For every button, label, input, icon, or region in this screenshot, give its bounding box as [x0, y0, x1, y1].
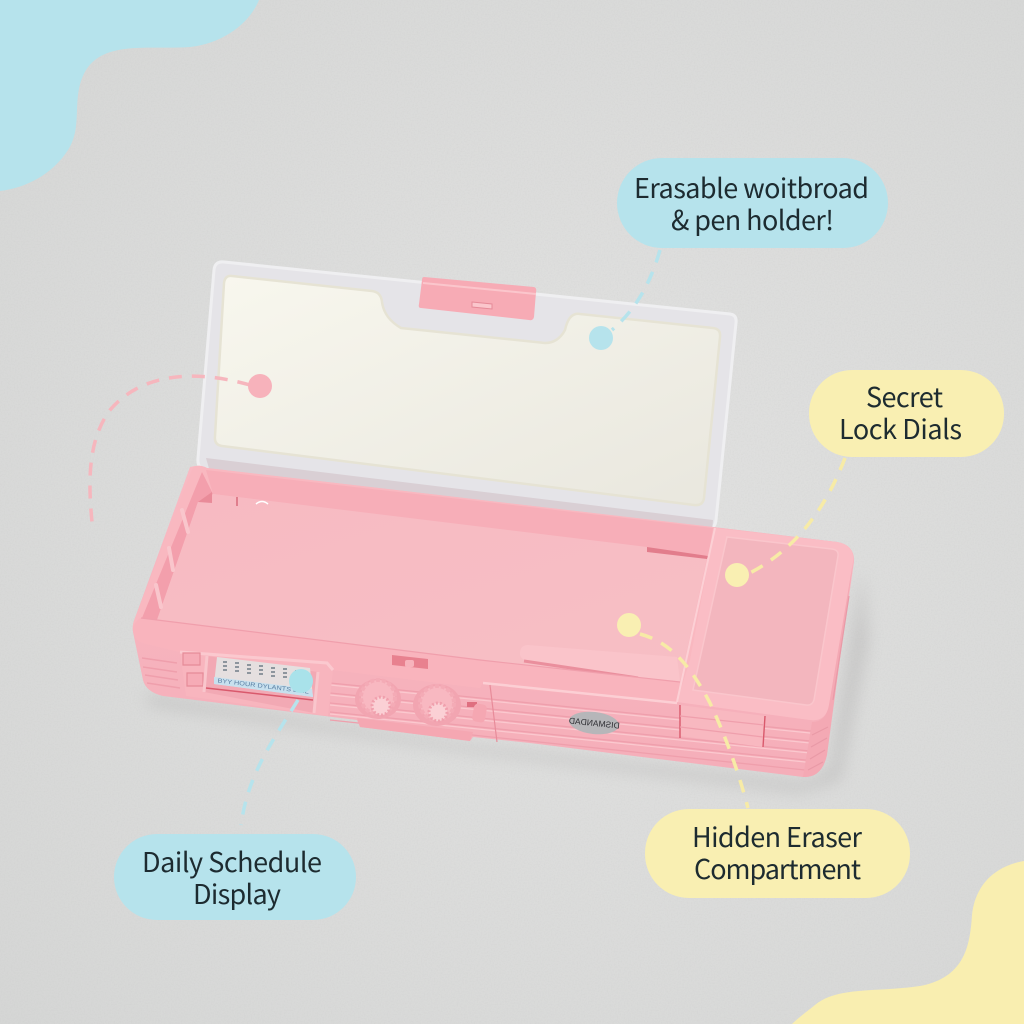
- pencil case: [133, 262, 854, 777]
- leader: schedule: [241, 700, 298, 825]
- callout: hidden eraser compartment: Compartment: [694, 848, 861, 887]
- section seam: [490, 685, 497, 742]
- callout: daily schedule display: Daily Schedule: [142, 841, 322, 880]
- case silhouette and side: [133, 466, 854, 777]
- callout: daily schedule display: [114, 834, 356, 920]
- ribs main: [330, 683, 820, 770]
- floor marks: [236, 497, 238, 506]
- callout: hidden eraser compartment: [645, 809, 910, 898]
- metal badge: DISMANDAD: [568, 715, 620, 731]
- floor ledge: [520, 645, 680, 682]
- front ledge: [133, 618, 680, 702]
- leader: eraser: [640, 634, 748, 808]
- lid hinge strip: [206, 458, 713, 532]
- leader: lock dials: [748, 458, 845, 574]
- ledge slot: [392, 655, 428, 669]
- marker dots: [248, 326, 749, 693]
- lock dials: [355, 679, 487, 741]
- wall ribs: [156, 510, 188, 607]
- ribs left: [142, 658, 180, 688]
- interior slot: [647, 547, 708, 559]
- yellow corner blob: [792, 861, 1024, 1024]
- case top rim: [133, 466, 853, 720]
- blue corner blob: [0, 0, 259, 191]
- front ribbed side: [142, 562, 853, 777]
- leader: erasable: [612, 250, 660, 330]
- callout: whiteboard and pen holder: [617, 158, 888, 248]
- interior floor: [157, 494, 707, 682]
- side shade: [803, 562, 853, 777]
- callout: daily schedule display: Display: [193, 873, 281, 912]
- front hatch: [680, 705, 765, 747]
- lid clasp: [419, 277, 536, 320]
- schedule display window: BYY HOUR DYLANTS EVIL: [217, 678, 310, 696]
- schedule display window: [180, 652, 333, 716]
- right compartment lid: [677, 528, 853, 720]
- callout: whiteboard and pen holder: & pen holder!: [671, 199, 834, 238]
- callout: secret lock dials: Secret: [866, 376, 943, 415]
- interior left wall: [142, 472, 213, 620]
- whiteboard panel: [215, 276, 720, 505]
- callout: secret lock dials: Lock Dials: [839, 408, 962, 447]
- interior back wall: [206, 470, 713, 558]
- callout: hidden eraser compartment: Hidden Eraser: [692, 816, 863, 855]
- open lid: [198, 262, 736, 532]
- callout: whiteboard and pen holder: Erasable woitbroad: [634, 167, 869, 206]
- metal badge: [568, 709, 620, 737]
- case shadow: [146, 570, 868, 792]
- leader: whiteboard: [90, 376, 250, 522]
- wall corner notch: [198, 492, 212, 503]
- connector lines: [90, 250, 845, 825]
- callout: secret lock dials: [809, 370, 1004, 457]
